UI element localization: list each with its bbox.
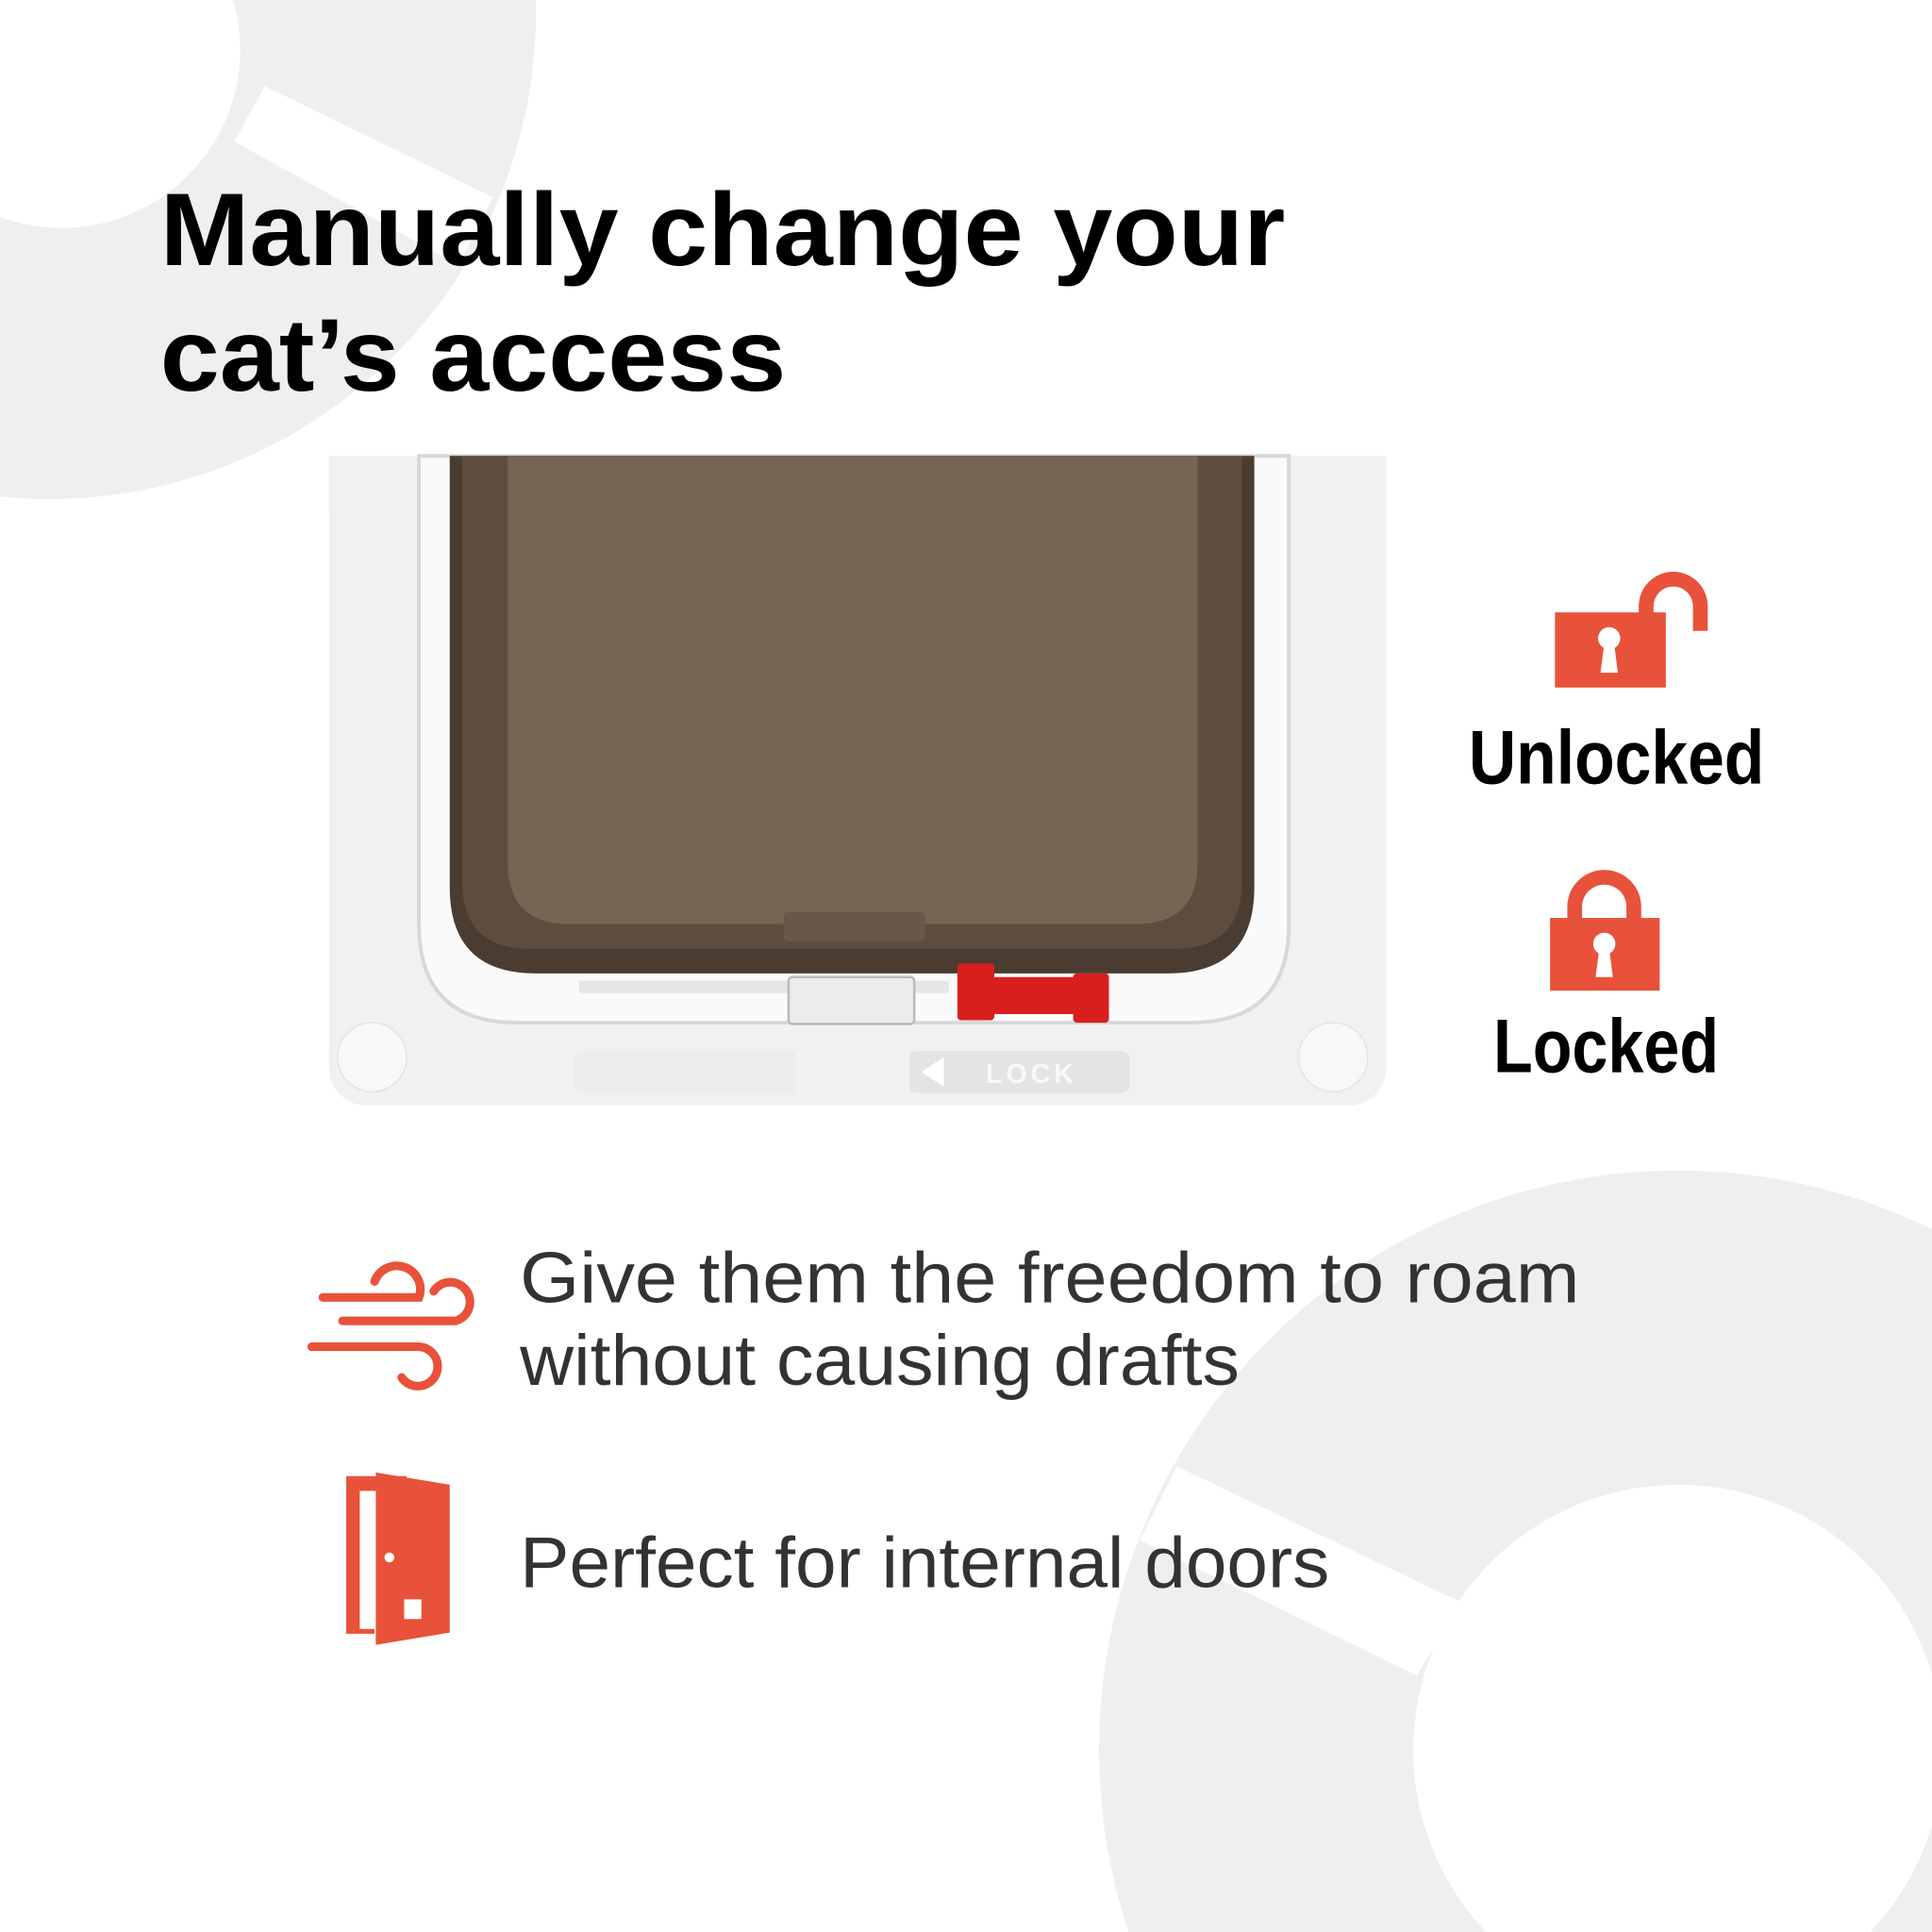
red lock slider xyxy=(958,963,1109,1023)
icon: door xyxy=(346,1473,450,1645)
lock label xyxy=(909,1051,1130,1093)
title xyxy=(160,173,1285,413)
icon: locked padlock xyxy=(1550,870,1659,991)
text: freedom to roam: Give them the freedom to roam xyxy=(520,1239,1579,1319)
title: cat’s access xyxy=(160,298,786,413)
text: freedom to roam: without causing drafts xyxy=(519,1321,1240,1401)
cat flap product image xyxy=(329,456,1386,1106)
background shape: top-left ring xyxy=(0,0,536,499)
background shape: bottom-right ring xyxy=(1099,1171,1932,1932)
label: Locked: Locked xyxy=(1493,1004,1719,1089)
label: Unlocked: Unlocked xyxy=(1469,716,1764,801)
title: Manually change your xyxy=(160,173,1285,288)
icon: unlocked padlock xyxy=(1555,572,1707,688)
text: internal doors: Perfect for internal doors xyxy=(520,1523,1329,1603)
icon: wind xyxy=(311,1266,470,1386)
lock label: LOCK xyxy=(986,1059,1077,1090)
text: freedom to roam xyxy=(519,1239,1579,1401)
